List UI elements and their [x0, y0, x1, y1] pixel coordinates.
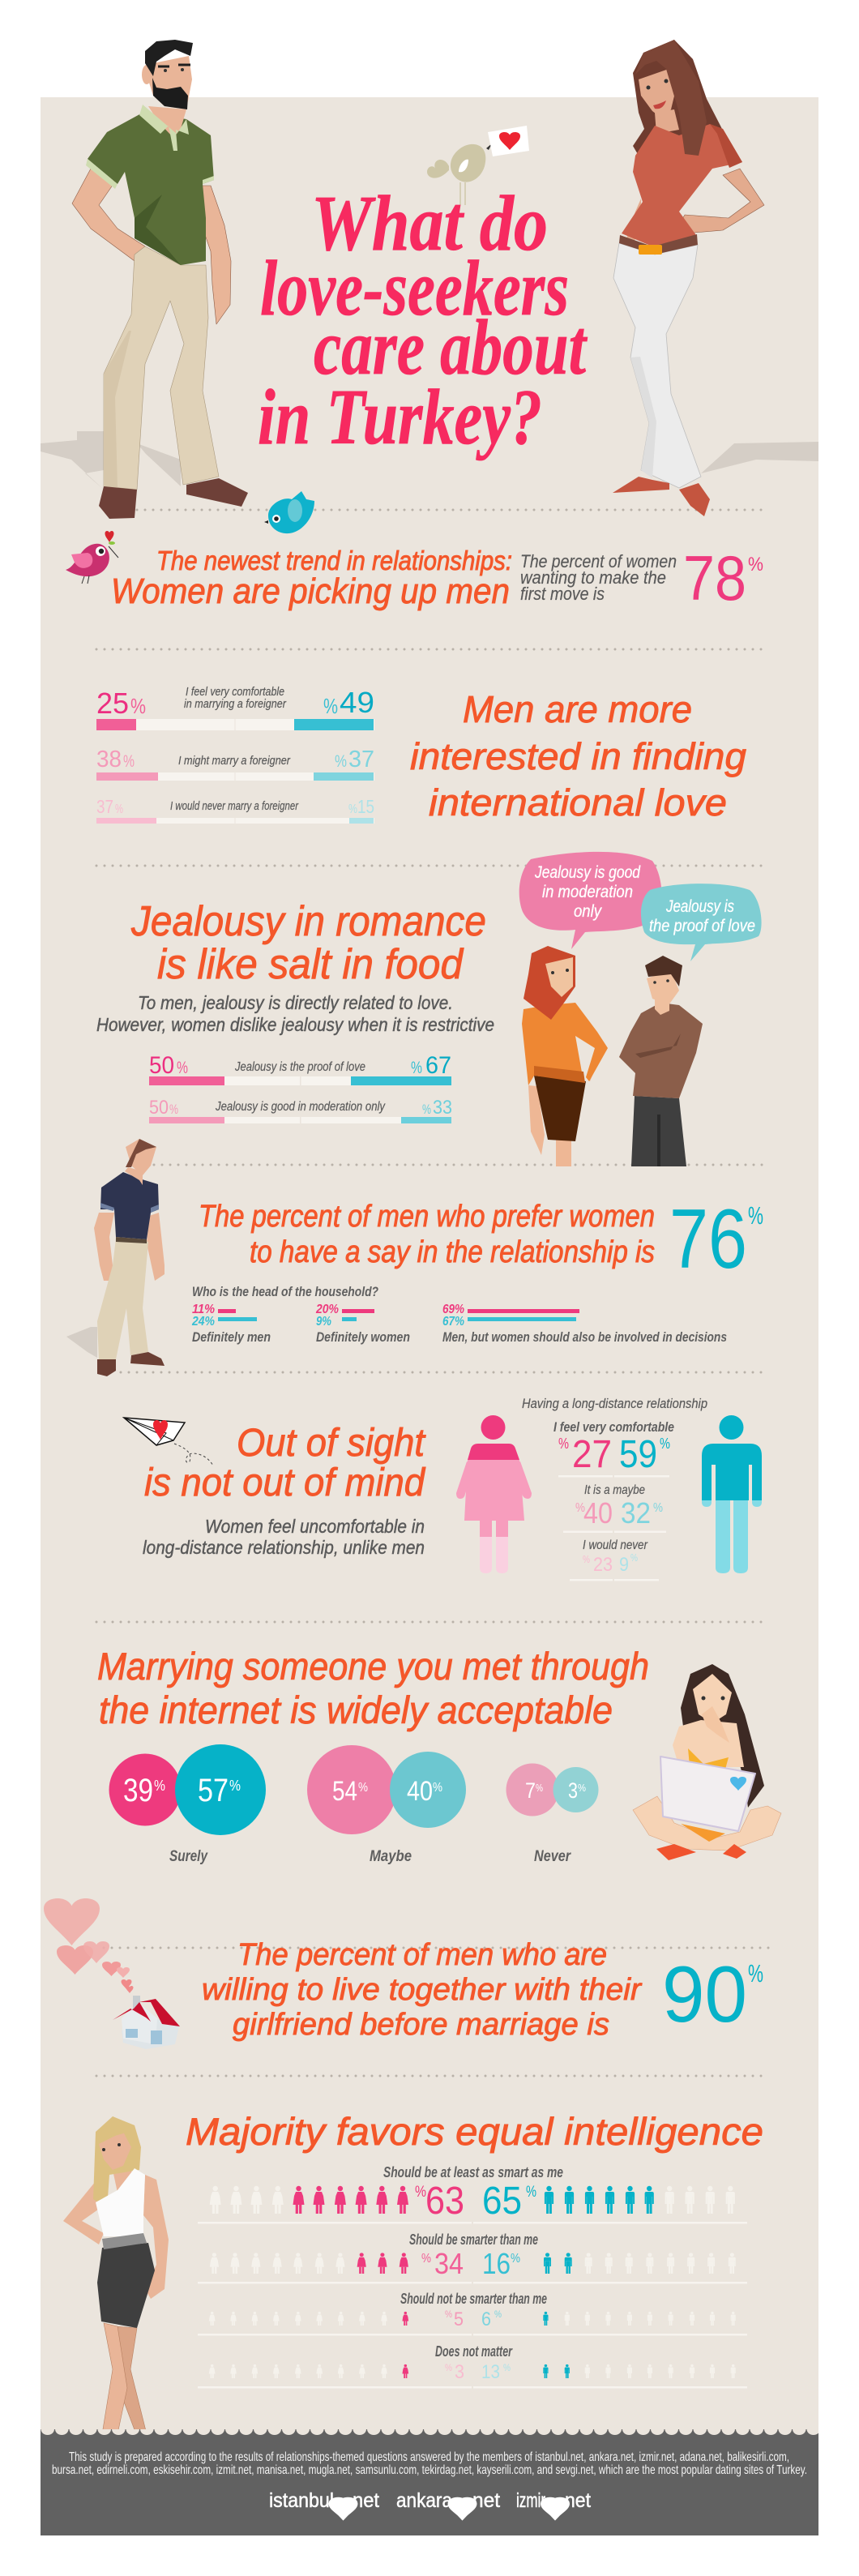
bar 1: 49: [340, 686, 374, 719]
bar: moderation only: %: [422, 1102, 431, 1117]
bar 3: 37: [96, 796, 113, 817]
row: not smarter than me: 5: [454, 2309, 464, 2330]
chart: maybe: 40: [407, 1776, 433, 1807]
bar 2: [96, 747, 374, 781]
stat rows: 9: [619, 1554, 629, 1576]
logos: istanbul: [269, 2489, 334, 2512]
stat: 76%: %: [748, 1201, 763, 1230]
illustration: man in navy shirt: [66, 1139, 165, 1376]
bar: moderation only: %: [169, 1102, 178, 1117]
heading: [97, 1645, 649, 1731]
illustration: man in brown: [619, 956, 703, 1166]
heading: Marrying someone you met through: [97, 1645, 649, 1688]
icon: paper plane: [124, 1418, 213, 1466]
chart: maybe: Maybe: [370, 1848, 412, 1865]
stat: 78%: 78: [683, 542, 746, 614]
row: not smarter than me: Should not be smarter than me: [400, 2291, 547, 2307]
illustration: woman with laptop: [633, 1664, 781, 1860]
icon: woman: [456, 1415, 532, 1573]
text block: To men, jealousy is directly related to love.: [138, 992, 453, 1013]
illustration: man in green shirt: [41, 40, 248, 519]
bar: proof of love: 50: [149, 1052, 174, 1079]
section: women picking up men: [66, 531, 763, 614]
footer text: [52, 2450, 807, 2477]
row: does not matter: %: [503, 2362, 511, 2373]
row: smarter than me: [198, 2232, 747, 2284]
bar 3: I would never marry a foreigner: [170, 799, 299, 813]
chart: never: %: [536, 1782, 543, 1794]
heading: Majority favors equal intelligence: [186, 2110, 763, 2153]
stat: 78%: %: [748, 554, 763, 576]
row: not smarter than me: %: [494, 2309, 502, 2320]
heading: to have a say in the relationship is: [250, 1235, 655, 1269]
heading: The percent of men who are: [237, 1938, 607, 1972]
illustration: woman in orange: [522, 946, 608, 1166]
heading: [144, 1422, 426, 1504]
dotted dividers: [96, 510, 772, 2076]
row: smarter than me: 16: [482, 2247, 511, 2280]
callout: teal bubble: Jealousy is: [665, 897, 734, 916]
bar 3: %: [115, 802, 123, 816]
bar: proof of love: %: [177, 1059, 188, 1077]
bar: proof of love: %: [411, 1059, 422, 1077]
title: care about: [314, 304, 588, 392]
chart: never: Never: [534, 1848, 571, 1865]
chart: maybe: 54: [332, 1776, 357, 1807]
bar 1: 25: [96, 687, 129, 720]
title: What do: [311, 180, 548, 267]
stat rows: %: [575, 1501, 585, 1515]
chart: head of the household: 20%: [315, 1303, 339, 1316]
stat: 76%: 76: [669, 1192, 747, 1286]
bar 1: %: [323, 694, 338, 718]
chart: head of the household: 24%: [191, 1315, 215, 1329]
chart: surely: %: [154, 1778, 165, 1794]
text block: [520, 551, 677, 604]
stat: 90%: 90: [662, 1949, 747, 2039]
heading: is like salt in food: [157, 941, 464, 988]
logos: ankara: [396, 2489, 452, 2512]
icon: hearts: [44, 1898, 133, 1993]
text block: wanting to make the: [520, 567, 666, 588]
chart: surely: [109, 1744, 266, 1865]
heading: [410, 688, 746, 824]
bar 2: 37: [348, 747, 374, 772]
heading: Out of sight: [237, 1422, 426, 1465]
stat rows: [553, 1419, 674, 1581]
section: foreigner bars: [96, 685, 746, 824]
row: not smarter than me: [198, 2291, 747, 2336]
row: at least as smart: 63: [425, 2180, 464, 2223]
row: at least as smart: %: [526, 2184, 536, 2201]
text block: However, women dislike jealousy when it is restrictive: [96, 1014, 494, 1035]
bar 1: %: [130, 694, 146, 718]
logos: net: [565, 2489, 591, 2512]
icon: house: [113, 1996, 180, 2049]
chart: maybe: %: [358, 1781, 368, 1795]
stat rows: It is a maybe: [584, 1483, 645, 1497]
callout: pink bubble: Jealousy is good: [534, 863, 641, 882]
heading: [202, 1938, 642, 2042]
chart: head of the household: 9%: [316, 1315, 331, 1329]
section: equal intelligence: [63, 2110, 763, 2434]
stat rows: %: [653, 1501, 663, 1515]
stat rows: %: [660, 1436, 670, 1452]
chart: head of the household: 67%: [442, 1315, 464, 1329]
row: at least as smart: [198, 2164, 747, 2224]
heading: is not out of mind: [144, 1461, 425, 1504]
bar 1: I feel very comfortable: [186, 685, 284, 699]
heading: [199, 1200, 655, 1269]
row: smarter than me: %: [511, 2252, 520, 2266]
bar: proof of love: [149, 1052, 451, 1085]
stat rows: 27: [572, 1433, 612, 1476]
icon: bird with heart note: [427, 126, 529, 205]
bar 1: [96, 685, 374, 730]
chart: never: [506, 1764, 598, 1865]
bar: moderation only: [149, 1097, 452, 1123]
row: not smarter than me: 6: [481, 2309, 491, 2330]
callout: teal bubble: [641, 884, 762, 961]
stat rows: %: [583, 1553, 590, 1565]
bar: moderation only: 33: [433, 1097, 452, 1119]
stat rows: 40: [583, 1496, 613, 1530]
footer: [41, 2429, 818, 2535]
chart: head of the household: Men, but women should also be involved in decisions: [442, 1329, 727, 1345]
heading: [130, 898, 486, 988]
heading: the internet is widely acceptable: [99, 1688, 613, 1731]
section: long-distance relationship: [124, 1396, 762, 1581]
chart: maybe: %: [433, 1781, 442, 1795]
section: living together: [44, 1898, 763, 2049]
title: in Turkey?: [258, 374, 542, 461]
row: at least as smart: %: [415, 2184, 426, 2201]
callout: pink bubble: in moderation: [542, 883, 633, 901]
bar: moderation only: 50: [149, 1097, 169, 1119]
heading: The percent of men who prefer women: [199, 1200, 655, 1234]
text block: [143, 1516, 425, 1558]
row: smarter than me: %: [421, 2252, 431, 2266]
bar 2: I might marry a foreigner: [178, 754, 291, 768]
chart: head of the household: [191, 1284, 727, 1345]
chart: maybe: [307, 1745, 466, 1865]
chart: never: 3: [568, 1778, 578, 1803]
chart: never: %: [578, 1782, 586, 1794]
heading: [111, 546, 512, 611]
section: men prefer women to have a say: [66, 1139, 763, 1376]
stat rows: 23: [593, 1554, 613, 1576]
heading: The newest trend in relationships:: [156, 546, 512, 576]
chart: surely: Surely: [169, 1848, 208, 1865]
row: smarter than me: Should be smarter than me: [409, 2232, 538, 2248]
chart: surely: %: [229, 1778, 241, 1794]
section: jealousy: [96, 852, 762, 1166]
text block: [96, 992, 494, 1035]
heading: international love: [429, 781, 727, 824]
bar: moderation only: Jealousy is good in moderation only: [215, 1100, 386, 1114]
heading: interested in finding: [410, 735, 746, 777]
section: marrying through the internet: [97, 1645, 781, 1865]
bar 1: in marrying a foreigner: [184, 697, 287, 711]
chart: surely: 39: [123, 1773, 153, 1808]
bar 2: 38: [96, 747, 122, 772]
chart: never: 7: [525, 1778, 536, 1803]
bar: proof of love: Jealousy is the proof of love: [234, 1060, 365, 1074]
heading: Jealousy in romance: [130, 898, 486, 945]
bar 2: %: [335, 752, 347, 771]
title: love-seekers: [260, 245, 569, 332]
row: does not matter: 13: [481, 2361, 500, 2383]
callout: pink bubble: only: [574, 902, 602, 921]
stat rows: 32: [621, 1496, 651, 1530]
text block: The percent of women: [520, 551, 677, 571]
stat rows: I feel very comfortable: [553, 1419, 674, 1435]
row: does not matter: 3: [455, 2361, 464, 2383]
text block: label: Having a long-distance relationship: [522, 1396, 707, 1411]
logos: izmir: [516, 2489, 545, 2512]
callout: teal bubble: the proof of love: [649, 917, 755, 935]
icon: blue bird: [264, 491, 314, 533]
chart: head of the household: 69%: [442, 1303, 464, 1316]
row: at least as smart: Should be at least as smart as me: [383, 2164, 563, 2180]
row: does not matter: %: [445, 2362, 452, 2373]
stat rows: %: [630, 1551, 638, 1564]
row: does not matter: [198, 2343, 747, 2388]
callout: pink bubble: [519, 852, 662, 949]
bar 2: %: [123, 752, 135, 771]
row: not smarter than me: %: [445, 2309, 452, 2320]
illustration: woman in red shirt: [613, 40, 818, 516]
stat rows: I would never: [583, 1538, 648, 1552]
row: smarter than me: 34: [434, 2247, 464, 2280]
chart: head of the household: 11%: [192, 1303, 215, 1316]
chart: head of the household: Definitely women: [316, 1329, 410, 1345]
row: at least as smart: 65: [482, 2180, 522, 2223]
row: does not matter: Does not matter: [435, 2343, 513, 2360]
bar 3: %: [348, 802, 357, 816]
text block: first move is: [520, 584, 605, 604]
logos: net: [472, 2489, 500, 2512]
heading: Men are more: [463, 688, 692, 730]
icon: pink bird: [66, 531, 118, 584]
bar: proof of love: 67: [425, 1052, 451, 1079]
heading: Women are picking up men: [111, 571, 510, 611]
bar 3: 15: [357, 796, 374, 817]
chart: head of the household: Definitely men: [192, 1329, 271, 1345]
text block: long-distance relationship, unlike men: [143, 1537, 425, 1558]
heading: willing to live together with their: [202, 1973, 642, 2007]
chart: head of the household: Who is the head of the household?: [192, 1284, 378, 1299]
chart: surely: 57: [198, 1773, 229, 1808]
icon: man: [702, 1415, 762, 1573]
title: [258, 180, 588, 461]
bar 3: [96, 796, 374, 824]
heading: girlfriend before marriage is: [233, 2008, 609, 2042]
illustration: blonde woman: [63, 2116, 169, 2434]
text block: Women feel uncomfortable in: [205, 1516, 425, 1537]
logos: [269, 2489, 591, 2514]
stat rows: %: [558, 1436, 569, 1452]
stat rows: 59: [619, 1433, 657, 1476]
logos: net: [353, 2489, 379, 2512]
stat: 90%: %: [748, 1959, 763, 1988]
